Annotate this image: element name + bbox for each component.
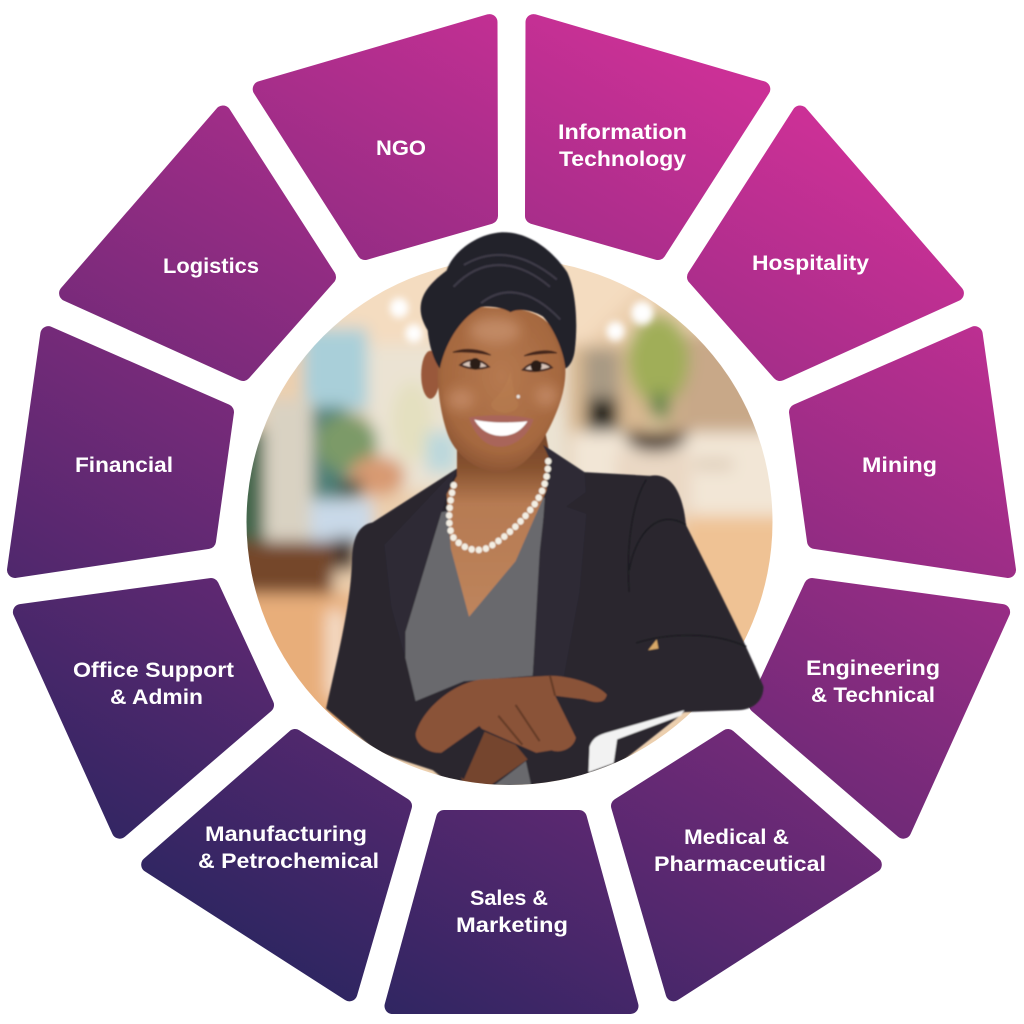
gap between arm and torso xyxy=(648,639,658,650)
panel: Sales & Marketing xyxy=(392,818,630,1006)
panel: Hospitality: Hospitality xyxy=(752,252,869,275)
panel: Financial: Financial xyxy=(75,454,173,477)
photo: blurred office background xyxy=(246,264,772,785)
panel: Engineering & Technical: Engineering xyxy=(806,657,940,680)
finger shading xyxy=(498,676,555,745)
panel: Office Support & Admin: & Admin xyxy=(110,686,203,709)
panel: Financial xyxy=(15,334,226,570)
panel: Sales & Marketing: Sales & xyxy=(470,887,548,910)
hair xyxy=(421,232,576,369)
panel: Engineering & Technical: & Technical xyxy=(811,684,935,707)
panel: Manufacturing & Petrochemical: Manufacturing xyxy=(205,823,367,846)
ceiling lights xyxy=(390,298,653,342)
panel: NGO xyxy=(261,22,490,252)
panel: Medical & Pharmaceutical: Pharmaceutical xyxy=(654,853,826,876)
eyebrows xyxy=(453,349,557,356)
panel: Manufacturing & Petrochemical xyxy=(149,737,404,993)
panel: Office Support & Admin xyxy=(21,586,266,831)
panel: Logistics xyxy=(67,114,328,373)
panel: NGO: NGO xyxy=(376,137,426,160)
blazer xyxy=(326,445,763,792)
panel: Engineering & Technical xyxy=(757,586,1002,831)
sleeve cuff xyxy=(442,726,485,780)
panel: Mining xyxy=(797,334,1008,570)
panel: Hospitality xyxy=(695,114,956,373)
photo: smiling woman in black blazer xyxy=(326,232,763,792)
eyes xyxy=(460,360,552,371)
chair back xyxy=(589,710,684,772)
cheek highlights xyxy=(447,318,559,410)
panel: Manufacturing & Petrochemical: & Petrochemical xyxy=(198,850,379,873)
panel: Mining: Mining xyxy=(862,454,937,477)
lower hand xyxy=(455,730,528,785)
panel: Medical & Pharmaceutical xyxy=(619,737,874,993)
panel: Office Support & Admin: Office Support xyxy=(73,659,234,682)
upper hand xyxy=(416,676,607,753)
mouth xyxy=(469,415,533,447)
pearl necklace xyxy=(449,461,548,550)
face xyxy=(438,307,565,472)
grey top lower part xyxy=(494,760,532,785)
sleeve fold lines xyxy=(628,479,746,647)
hair highlights xyxy=(454,255,560,320)
lapels xyxy=(534,445,584,652)
nose xyxy=(491,370,518,413)
panel: Logistics: Logistics xyxy=(163,255,259,278)
ear xyxy=(421,351,440,399)
panel: Information Technology: Technology xyxy=(559,148,686,171)
grey top xyxy=(405,498,545,701)
panel: Medical & Pharmaceutical: Medical & xyxy=(684,826,789,849)
panel: Sales & Marketing: Marketing xyxy=(456,914,568,937)
panel: Information Technology xyxy=(533,22,762,252)
neck and chest xyxy=(447,421,549,617)
panel: Information Technology: Information xyxy=(558,121,687,144)
